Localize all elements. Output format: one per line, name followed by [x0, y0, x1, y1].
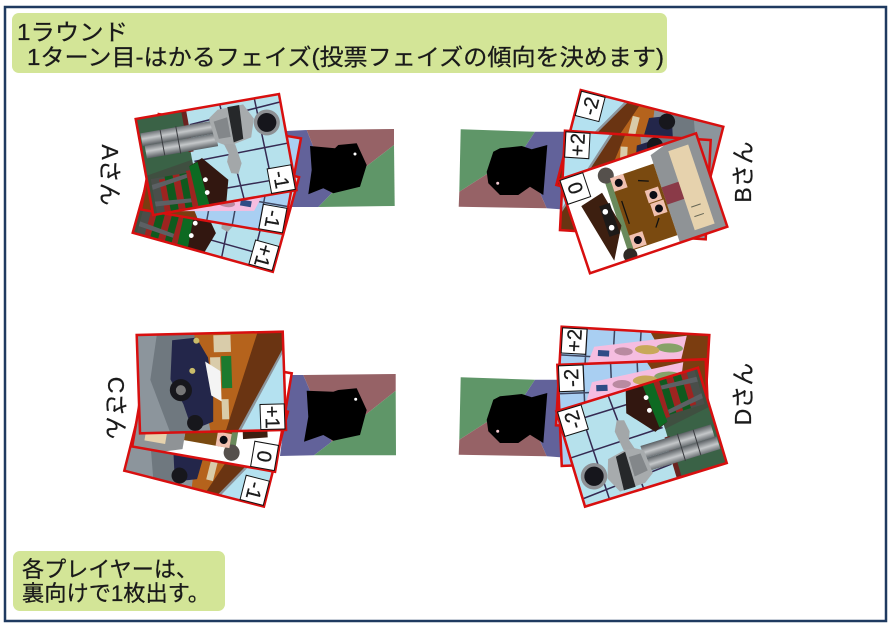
card D -2 robot: -2 — [561, 408, 587, 432]
card B +2 — [560, 131, 711, 239]
card C +1 — [137, 332, 286, 433]
label D: Dさん — [730, 363, 756, 425]
card C 0 — [132, 345, 292, 472]
note line 1: 各プレイヤーは、 — [22, 557, 198, 582]
instruction note — [13, 551, 225, 611]
label C: Cさん — [103, 377, 129, 439]
card C -1 — [124, 376, 288, 507]
card D -2 pink — [557, 359, 710, 466]
token mat C — [280, 374, 396, 456]
token mat D — [459, 377, 565, 457]
card B 0: 0 — [564, 179, 588, 197]
card A -1 robot: -1 — [268, 169, 293, 190]
card C -1: -1 — [241, 479, 266, 502]
card D +2: +2 — [564, 329, 587, 353]
card D -2 pink: -2 — [560, 368, 584, 387]
note line 2: 裏向けで1枚出す。 — [22, 581, 210, 606]
card B +2: +2 — [567, 133, 590, 157]
card D -2 robot — [556, 368, 727, 507]
card A +1: +1 — [249, 242, 276, 269]
cards of player B — [556, 90, 728, 276]
label A: Aさん — [97, 144, 123, 206]
card D +2 — [556, 327, 709, 434]
title line 1: 1ラウンド — [17, 19, 128, 45]
card A -1 robot — [136, 94, 297, 215]
card C +1: +1 — [260, 406, 283, 429]
title banner — [12, 13, 667, 73]
card B -2 — [556, 90, 723, 222]
card B -2: -2 — [578, 95, 604, 118]
cards of player D — [556, 327, 727, 507]
card A -1 pink: -1 — [259, 208, 284, 229]
card A -1 pink — [141, 114, 301, 234]
cards of player C — [124, 332, 292, 507]
card B 0 — [559, 133, 728, 276]
cards of player A — [133, 94, 301, 272]
token mat A — [286, 129, 395, 207]
title line 2: 1ターン目-はかるフェイズ(投票フェイズの傾向を決めます) — [27, 44, 664, 70]
token mat B — [459, 129, 565, 209]
label B: Bさん — [730, 141, 756, 203]
card C 0: 0 — [252, 449, 275, 464]
card A +1 — [133, 138, 299, 272]
